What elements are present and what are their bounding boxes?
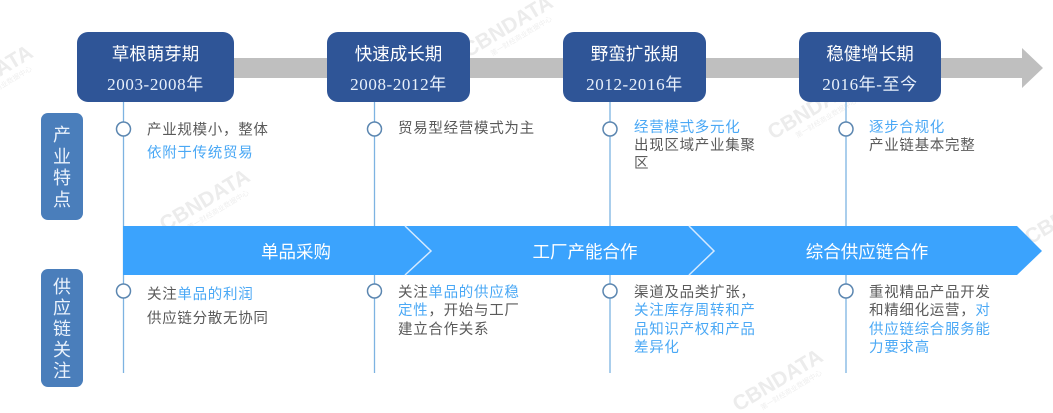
stage: grassroots: [77, 32, 234, 102]
stage: rapid growth: 2008-2012年: [350, 75, 447, 94]
watermarks: 第一财经商业数据中心: [186, 188, 251, 232]
row label: industry features: 特: [53, 168, 71, 188]
text: grassroots supply chain: [147, 286, 269, 327]
text: wild expansion features: 区: [634, 156, 649, 172]
stage: grassroots: 草根萌芽期: [112, 44, 199, 64]
band: supply chain stages: 工厂产能合作: [532, 242, 638, 262]
watermarks: CBNDATA: [156, 165, 254, 236]
band: supply chain stages: [123, 226, 1042, 275]
stage: steady growth: 2016年-至今: [822, 75, 918, 94]
text: steady growth supply chain: 和精细化运营，对: [869, 302, 991, 319]
band: supply chain stages: 综合供应链合作: [806, 242, 928, 262]
text: steady growth supply chain: 重视精品产品开发: [869, 284, 991, 301]
text: grassroots supply chain: 供应链分散无协同: [147, 309, 269, 327]
text: rapid growth supply chain: 关注单品的供应稳: [398, 283, 520, 301]
watermarks: 第一财经商业数据中心: [759, 368, 824, 412]
watermarks: 第一财经商业数据中心: [794, 96, 859, 140]
text: wild expansion supply chain: 渠道及品类扩张，: [634, 284, 756, 301]
stage: steady growth: 稳健增长期: [826, 44, 914, 64]
text: steady growth supply chain: 力要求高: [869, 339, 930, 356]
text: rapid growth supply chain: 建立合作关系: [398, 321, 489, 338]
text: rapid growth features: 贸易型经营模式为主: [398, 120, 535, 137]
timeline markers: [116, 122, 853, 298]
row label: supply chain focus: 关: [53, 340, 71, 360]
row label: industry features: [41, 113, 83, 220]
row label: industry features: 点: [53, 190, 71, 210]
row label: supply chain focus: [41, 269, 83, 387]
stage: wild expansion: [563, 32, 706, 102]
text: wild expansion features: 出现区域产业集聚: [634, 137, 756, 154]
watermarks: 第一财经商业数据中心: [489, 14, 554, 58]
text: wild expansion supply chain: 差异化: [634, 339, 680, 356]
row label: supply chain focus: 供: [53, 277, 71, 297]
text: rapid growth supply chain: 定性，开始与工厂: [398, 302, 520, 319]
text: wild expansion features: 经营模式多元化: [634, 119, 740, 136]
arrow: timeline: [200, 48, 1043, 88]
stage: rapid growth: 快速成长期: [355, 44, 442, 64]
text: wild expansion supply chain: [634, 284, 756, 356]
row label: industry features: 业: [53, 147, 71, 167]
stage: rapid growth: [327, 32, 470, 102]
stage: grassroots: 2003-2008年: [107, 75, 204, 94]
row label: supply chain focus: 链: [53, 319, 71, 339]
text: steady growth supply chain: [869, 284, 991, 356]
text: wild expansion supply chain: 关注库存周转和产: [634, 302, 756, 319]
text: rapid growth supply chain: [398, 283, 520, 338]
row label: supply chain focus: 注: [53, 361, 71, 381]
text: grassroots features: [147, 122, 269, 162]
text: steady growth features: 产业链基本完整: [869, 137, 975, 154]
text: wild expansion features: [634, 119, 756, 172]
text: grassroots supply chain: 关注单品的利润: [147, 286, 253, 303]
watermarks: CBNDATA: [764, 73, 862, 144]
text: grassroots features: 产业规模小，整体: [147, 122, 269, 138]
stage: wild expansion: 野蛮扩张期: [591, 44, 678, 64]
text: grassroots features: 依附于传统贸易: [147, 144, 253, 162]
vertical connector lines: [124, 102, 846, 373]
band: supply chain stages: 单品采购: [261, 242, 331, 262]
stage: steady growth: [799, 32, 941, 102]
text: wild expansion supply chain: 品知识产权和产品: [634, 321, 756, 338]
text: steady growth supply chain: 供应链综合服务能: [869, 320, 991, 338]
text: steady growth features: [869, 119, 975, 154]
row label: supply chain focus: 应: [53, 298, 71, 318]
text: steady growth features: 逐步合规化: [869, 119, 945, 136]
stage: wild expansion: 2012-2016年: [586, 75, 683, 94]
row label: industry features: 产: [53, 125, 71, 145]
